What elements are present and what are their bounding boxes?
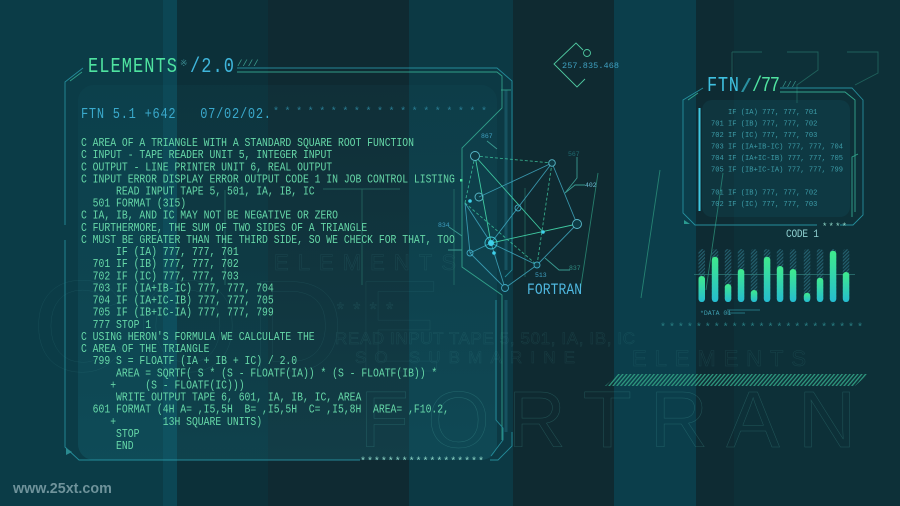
code listing: C INPUT - TAPE READER UNIT 5, INTEGER INPUT: [81, 149, 333, 163]
panel title: ELEMENTS: [88, 54, 177, 79]
code listing: + (S - FLOATF(IC))): [81, 380, 245, 393]
ghost background text: * * * *: [335, 302, 395, 322]
data label: *DATA 01: [700, 310, 731, 317]
right panel code: 701 IF (IB) 777, 777, 702: [711, 190, 817, 198]
right panel code: 702 IF (IC) 777, 777, 703: [711, 132, 817, 140]
right panel code: IF (IA) 777, 777, 701: [711, 109, 817, 117]
panel title: [88, 54, 259, 79]
FORTRAN label: FORTRAN: [527, 282, 582, 299]
right panel title: [707, 73, 797, 98]
bar chart: [694, 249, 855, 302]
ghost FORTRAN: FORTRAN: [360, 375, 856, 464]
right panel code: 702 IF (IC) 777, 777, 703: [711, 201, 817, 209]
code listing: END: [81, 440, 134, 453]
code 1 label: CODE 1: [786, 228, 819, 241]
ghost background text: [32, 250, 806, 399]
right panel stars: ****: [822, 222, 847, 232]
right star row: ***********************: [660, 322, 863, 334]
right panel code: 703 IF (IA+IB-IC) 777, 777, 704: [711, 144, 843, 152]
code listing: C AREA OF THE TRIANGLE: [81, 343, 210, 356]
code listing: + 13H SQUARE UNITS): [81, 416, 262, 429]
code listing: C USING HERON'S FORMULA WE CALCULATE THE: [81, 331, 315, 344]
code listing: C FURTHERMORE, THE SUM OF TWO SIDES OF A TRIANGLE: [81, 222, 367, 235]
ghost vertical lines: [225, 52, 878, 285]
hatch band: [605, 374, 868, 386]
right panel code: [711, 109, 843, 209]
right panel title: ///: [782, 81, 797, 90]
corner mark: [66, 448, 72, 455]
ghost background text: READ INPUT TAPE 5, 501, IA, IB, IC: [335, 329, 635, 348]
network diagram: [448, 141, 585, 292]
code listing: READ INPUT TAPE 5, 501, IA, IB, IC: [81, 186, 315, 199]
code listing: 704 IF (IA+IC-IB) 777, 777, 705: [81, 295, 274, 308]
panel header line: FTN 5.1 +642 07/02/02.: [81, 106, 271, 122]
ghost background text: SO SUBMARINE: [355, 348, 575, 367]
code listing: 705 IF (IB+IC-IA) 777, 777, 799: [81, 307, 274, 320]
right panel: [683, 88, 863, 225]
code listing: 702 IF (IC) 777, 777, 703: [81, 271, 239, 284]
right panel title: //: [740, 76, 752, 98]
right panel code: 705 IF (IB+IC-IA) 777, 777, 799: [711, 166, 843, 174]
panel title: ////: [237, 59, 259, 69]
slanted lines: [580, 170, 723, 298]
main panel background: [78, 85, 497, 460]
diamond tag: 257.835.468: [562, 61, 619, 71]
bottom stars: ******************: [360, 456, 484, 468]
panel title: /2.0: [190, 54, 234, 79]
code listing: AREA = SQRTF( S * (S - FLOATF(IA)) * (S - FLOATF(IB)) *: [81, 368, 437, 381]
code listing: 601 FORMAT (4H A= ,I5,5H B= ,I5,5H C= ,I5,8H AREA= ,F10.2,: [81, 404, 449, 417]
network labels: 837: [569, 265, 581, 272]
code listing: 701 IF (IB) 777, 777, 702: [81, 259, 239, 272]
code listing: IF (IA) 777, 777, 701: [81, 246, 239, 259]
ghost background text: ELEMENTS: [274, 250, 456, 275]
panel title: ※: [180, 59, 188, 69]
network labels: 513: [535, 272, 547, 279]
code listing: 777 STOP 1: [81, 319, 151, 332]
code listing: 703 IF (IA+IB-IC) 777, 777, 704: [81, 283, 274, 296]
network labels: 834: [438, 222, 450, 229]
code listing: WRITE OUTPUT TAPE 6, 601, IA, IB, IC, AREA: [81, 392, 362, 405]
ghost background text: ELEMENTS: [632, 346, 806, 371]
code listing: STOP: [81, 428, 139, 441]
panel header line: *******************: [273, 106, 487, 118]
code listing: 501 FORMAT (3I5): [81, 198, 186, 211]
diamond tag: [554, 43, 619, 87]
code listing: 799 S = FLOATF (IA + IB + IC) / 2.0: [81, 356, 297, 369]
network labels: 402: [585, 182, 597, 189]
code listing: C IA, IB, AND IC MAY NOT BE NEGATIVE OR ZERO: [81, 210, 338, 223]
panel header line: [81, 106, 487, 122]
network labels: 867: [481, 133, 493, 140]
code listing: C MUST BE GREATER THAN THE THIRD SIDE, SO WE CHECK FOR THAT, TOO: [81, 234, 455, 247]
right panel code: 701 IF (IB) 777, 777, 702: [711, 120, 817, 128]
right panel code: 704 IF (IA+IC-IB) 777, 777, 705: [711, 155, 843, 163]
right panel title: /77: [752, 73, 780, 98]
network labels: [438, 133, 597, 279]
data label: [700, 310, 760, 317]
code listing: C AREA OF A TRIANGLE WITH A STANDARD SQUARE ROOT FUNCTION: [81, 137, 414, 150]
code listing: C INPUT ERROR DISPLAY ERROR OUTPUT CODE 1 IN JOB CONTROL LISTING: [81, 174, 455, 187]
right panel title: FTN: [707, 73, 739, 98]
ghost background text: CODE: [32, 253, 442, 399]
code listing: C OUTPUT - LINE PRINTER UNIT 6, REAL OUTPUT: [81, 162, 333, 175]
main frame: [65, 68, 512, 460]
network labels: 567: [568, 151, 580, 158]
code listing: [81, 137, 455, 453]
watermark: www.25xt.com: [12, 481, 112, 497]
